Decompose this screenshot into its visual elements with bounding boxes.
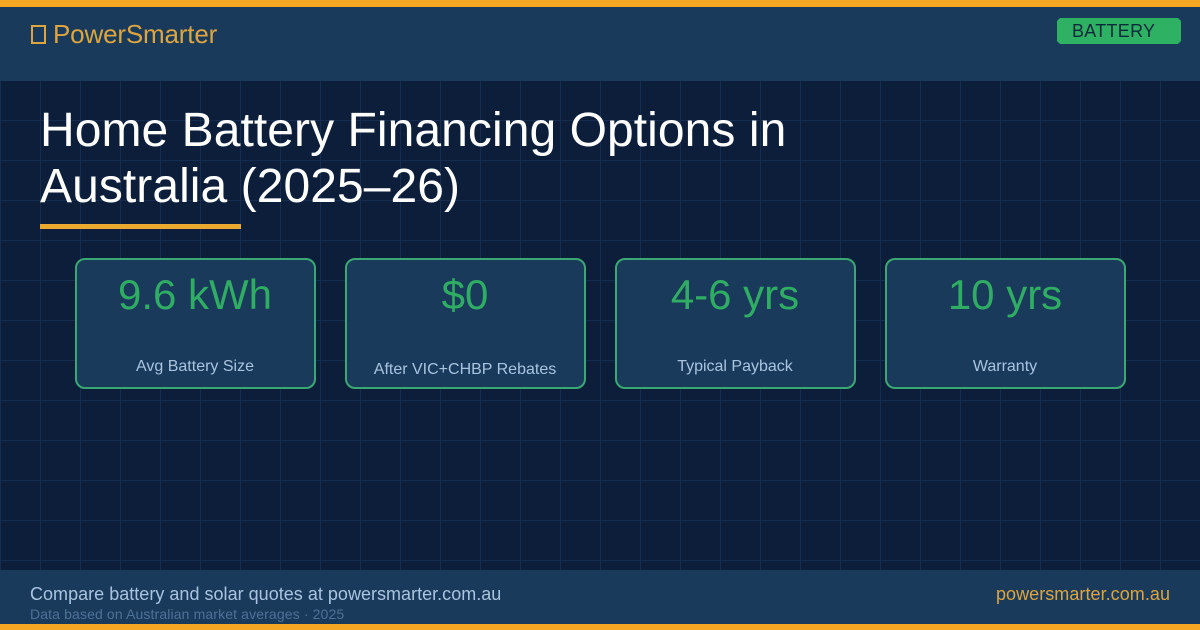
footer call to action: Compare battery and solar quotes at powersmarter.com.au	[30, 584, 501, 604]
stat card: warranty: 10 yrs	[948, 271, 1062, 318]
bottom accent bar	[0, 624, 1200, 630]
footer band	[0, 570, 1200, 630]
title	[40, 104, 786, 213]
stat card: payback	[615, 258, 856, 389]
stat card: battery size: 9.6 kWh	[118, 271, 272, 318]
icon: missing glyph box	[31, 25, 46, 44]
stat card: battery size	[75, 258, 316, 389]
brand name: PowerSmarter	[53, 19, 217, 49]
stat card: payback: 4-6 yrs	[671, 271, 799, 318]
stat card: after rebates: After VIC+CHBP Rebates	[374, 361, 556, 378]
title: Home Battery Financing Options in	[40, 104, 786, 157]
badge: battery: BATTERY	[1072, 21, 1155, 41]
footer data note: Data based on Australian market averages · 2025	[30, 606, 344, 622]
stat card: warranty	[885, 258, 1126, 389]
stat card: after rebates: $0	[442, 271, 488, 318]
stat card: after rebates	[345, 258, 586, 389]
title: Australia (2025–26)	[40, 160, 460, 213]
badge: battery	[1057, 18, 1181, 44]
top accent bar	[0, 0, 1200, 7]
footer url: powersmarter.com.au	[996, 584, 1170, 604]
logo	[31, 19, 217, 49]
header band	[0, 0, 1200, 81]
title underline	[40, 224, 241, 229]
stat card: battery size: Avg Battery Size	[136, 358, 254, 375]
stat card: payback: Typical Payback	[677, 358, 793, 375]
stat card: warranty: Warranty	[973, 358, 1037, 375]
